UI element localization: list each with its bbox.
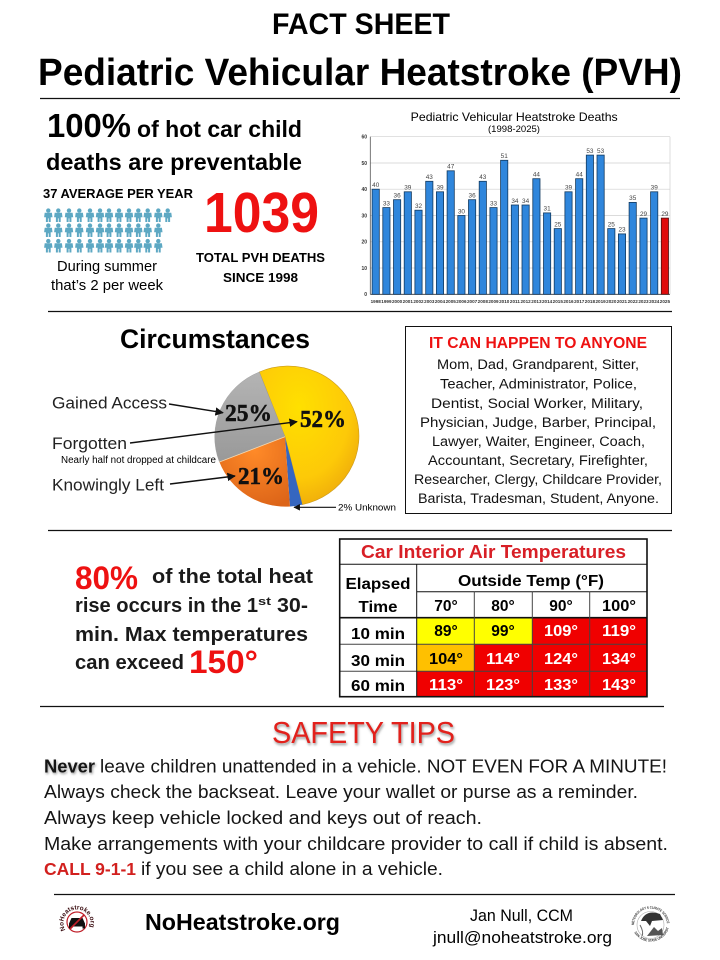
x axis year labels: 2006 bbox=[456, 299, 467, 304]
x axis year labels: 2018 bbox=[585, 299, 595, 304]
table headers: Time bbox=[358, 599, 398, 616]
list of people: Researcher, Clergy, Childcare Provider, bbox=[414, 472, 662, 487]
headline: 100% preventable bbox=[46, 107, 302, 175]
table rows: 30 min bbox=[351, 653, 405, 670]
label: forgotten with arrow: Nearly half not dropped at childcare bbox=[61, 455, 216, 466]
website link text: NoHeatstroke.org bbox=[145, 909, 340, 935]
panel: it can happen to anyone: IT CAN HAPPEN TO ANYONE bbox=[429, 335, 647, 352]
x axis year labels: 2008 bbox=[478, 299, 488, 304]
table rows: 134° bbox=[602, 651, 636, 668]
tip: childcare arrangements: Make arrangements with your childcare provider to call if child is absent. bbox=[44, 833, 668, 854]
bar value labels: 39 bbox=[436, 185, 444, 192]
percent labels: 21% bbox=[238, 464, 284, 490]
y axis labels bbox=[361, 134, 367, 298]
safety tips list bbox=[44, 756, 668, 879]
callout: 80% of heat rise: can exceed bbox=[75, 651, 184, 674]
list of people: Teacher, Administrator, Police, bbox=[440, 376, 637, 392]
list of people: Accountant, Secretary, Firefighter, bbox=[428, 453, 648, 468]
list of people: Barista, Tradesman, Student, Anyone. bbox=[418, 491, 659, 506]
stat: 37 average per year: that’s 2 per week bbox=[51, 277, 163, 294]
label: gained access with arrow bbox=[52, 394, 223, 413]
bar value labels: 34 bbox=[522, 198, 530, 205]
tip: never leave children: Never bbox=[45, 757, 96, 778]
y axis labels: 10 bbox=[361, 266, 367, 272]
callout: 80% of heat rise bbox=[75, 560, 313, 680]
y axis labels: 30 bbox=[361, 213, 367, 219]
icon: meteorology department seal: METEOROLOGY & CLIMATE SCIENCE bbox=[632, 906, 670, 925]
table title: Car Interior Air Temperatures bbox=[361, 542, 626, 562]
headline: 100% preventable: 100% bbox=[47, 107, 131, 144]
bar value labels: 32 bbox=[415, 203, 422, 210]
label: knowingly left with arrow: Knowingly Left bbox=[52, 476, 164, 494]
list of people bbox=[414, 357, 662, 506]
x axis year labels: 2016 bbox=[563, 299, 574, 304]
list of people: Physician, Judge, Barber, Principal, bbox=[420, 415, 656, 430]
x axis year labels: 2020 bbox=[606, 299, 617, 304]
callout: 80% of heat rise: of the total heat bbox=[152, 565, 313, 588]
bar value labels: 35 bbox=[629, 195, 637, 202]
x axis year labels: 2014 bbox=[542, 299, 553, 304]
table headers: 90° bbox=[549, 598, 573, 615]
bar value labels: 53 bbox=[597, 148, 605, 155]
contact details bbox=[432, 907, 612, 947]
bars bbox=[372, 155, 668, 294]
headline: 100% preventable: of hot car child bbox=[137, 116, 302, 142]
x axis year labels: 2012 bbox=[520, 299, 531, 304]
bar value labels: 29 bbox=[661, 211, 669, 218]
tip: never leave children: leave children unattended in a vehicle. NOT EVEN FOR A MINUTE! bbox=[100, 756, 667, 777]
list of people: Mom, Dad, Grandparent, Sitter, bbox=[437, 357, 639, 372]
bar value labels: 44 bbox=[533, 172, 540, 178]
bar value labels: 25 bbox=[608, 221, 615, 228]
label: gained access with arrow: Gained Access bbox=[52, 394, 167, 412]
percent labels: 25% bbox=[225, 401, 272, 427]
table rows: 104° bbox=[429, 651, 463, 668]
stat: 1039 total deaths: TOTAL PVH DEATHS bbox=[196, 250, 325, 265]
x axis year labels: 2013 bbox=[531, 299, 542, 304]
table rows: 10 min bbox=[351, 626, 405, 643]
callout: 80% of heat rise: 150° bbox=[189, 644, 258, 680]
bar value labels: 53 bbox=[586, 148, 594, 155]
list of people: Dentist, Social Worker, Military, bbox=[431, 396, 643, 411]
table headers: Outside Temp (°F) bbox=[458, 573, 604, 590]
bar value labels: 25 bbox=[554, 221, 562, 228]
label: forgotten with arrow bbox=[52, 422, 297, 466]
list of people: Lawyer, Waiter, Engineer, Coach, bbox=[432, 434, 645, 449]
tip: call 9-1-1: if you see a child alone in a vehicle. bbox=[141, 858, 443, 879]
pie slice: knowingly left 21% bbox=[219, 437, 290, 507]
tip: never leave children: Never bbox=[44, 756, 95, 777]
table cell colours bbox=[417, 618, 647, 697]
table rows: 99° bbox=[491, 623, 515, 640]
bar value labels: 39 bbox=[565, 185, 572, 192]
pie slice: forgotten 52% bbox=[259, 366, 359, 505]
x axis year labels: 2024 bbox=[649, 299, 660, 304]
x axis year labels: 2003 bbox=[424, 299, 435, 304]
x axis year labels: 2010 bbox=[499, 299, 510, 304]
table rows: 89° bbox=[434, 623, 458, 640]
bar value labels: 23 bbox=[618, 227, 626, 234]
table rows bbox=[351, 623, 636, 695]
headline: 100% preventable: deaths are preventable bbox=[46, 149, 302, 175]
icon: rows of 37 child figures bbox=[44, 208, 172, 252]
label: knowingly left with arrow bbox=[52, 476, 235, 494]
bar chart: deaths per year bbox=[361, 110, 670, 304]
table headers: 100° bbox=[602, 598, 636, 615]
pie chart: circumstances bbox=[52, 366, 396, 514]
bar value labels: 39 bbox=[651, 185, 658, 192]
y axis labels: 60 bbox=[361, 134, 367, 140]
callout: 80% of heat rise: min. Max temperatures bbox=[75, 623, 308, 646]
label: 2% unknown with arrow: 2% Unknown bbox=[338, 502, 396, 514]
title: Pediatric Vehicular Heatstroke (PVH) bbox=[38, 52, 682, 94]
table: car interior air temperatures bbox=[340, 539, 647, 697]
percent labels bbox=[225, 401, 346, 490]
stat: 37 average per year bbox=[43, 186, 194, 294]
table headers: 70° bbox=[434, 598, 458, 615]
table rows: 143° bbox=[602, 677, 636, 694]
bar value labels: 30 bbox=[458, 208, 465, 215]
bar value labels: 36 bbox=[469, 192, 476, 200]
table rows: 113° bbox=[429, 677, 463, 694]
bar value labels: 40 bbox=[372, 182, 380, 189]
bar value labels: 33 bbox=[383, 200, 390, 207]
x axis year labels: 2007 bbox=[467, 299, 478, 304]
table rows: 119° bbox=[602, 623, 636, 640]
bar value labels: 47 bbox=[447, 164, 455, 171]
bar value labels: 39 bbox=[404, 185, 412, 192]
callout: 80% of heat rise: 30- bbox=[277, 594, 308, 617]
percent labels: 52% bbox=[300, 407, 346, 433]
callout: 80% of heat rise: rise occurs in the 1 bbox=[75, 594, 258, 617]
label: forgotten with arrow: Forgotten bbox=[52, 434, 127, 453]
x axis year labels: 2023 bbox=[638, 299, 649, 304]
stat: 1039 total deaths: SINCE 1998 bbox=[223, 270, 298, 285]
pie slice: gained access 25% bbox=[215, 372, 285, 462]
heading: safety tips: SAFETY TIPS bbox=[272, 715, 455, 750]
stat: 37 average per year: During summer bbox=[57, 258, 157, 275]
bar value labels: 34 bbox=[511, 198, 519, 205]
bar value labels: 31 bbox=[544, 206, 551, 213]
table headers: Elapsed bbox=[346, 576, 410, 593]
contact details: Jan Null, CCM bbox=[470, 907, 573, 925]
bar value labels: 43 bbox=[426, 174, 433, 181]
heading: circumstances: Circumstances bbox=[120, 324, 310, 354]
x axis year labels: 2015 bbox=[553, 299, 563, 304]
y axis labels: 20 bbox=[361, 240, 367, 246]
table rows: 109° bbox=[544, 623, 578, 640]
stat: 1039 total deaths: 1039 bbox=[204, 181, 319, 245]
icon: NoHeatstroke logo: NoHeatstroke.org bbox=[59, 905, 94, 932]
bar value labels: 43 bbox=[479, 174, 487, 181]
callout: 80% of heat rise: 80% bbox=[75, 560, 138, 596]
title: FACT SHEET bbox=[272, 8, 450, 41]
label: 2% unknown with arrow bbox=[294, 502, 396, 514]
table rows: 124° bbox=[544, 651, 578, 668]
x axis year labels: 2004 bbox=[435, 299, 446, 304]
x axis year labels: 2009 bbox=[488, 299, 499, 304]
x axis year labels: 2017 bbox=[574, 299, 585, 304]
x axis year labels: 1998 bbox=[371, 299, 381, 304]
y axis labels: 50 bbox=[361, 161, 367, 167]
x axis year labels: 2000 bbox=[392, 299, 403, 304]
chart title: Pediatric Vehicular Heatstroke Deaths bbox=[411, 110, 618, 124]
bar value labels bbox=[372, 148, 669, 234]
x axis year labels: 2005 bbox=[446, 299, 456, 304]
bar value labels: 51 bbox=[501, 153, 508, 160]
table grid bbox=[340, 539, 647, 697]
table rows: 60 min bbox=[351, 678, 405, 695]
x axis year labels: 2022 bbox=[628, 299, 638, 304]
bar value labels: 44 bbox=[576, 172, 583, 178]
x axis year labels: 2025 bbox=[660, 299, 670, 304]
table rows: 133° bbox=[544, 677, 578, 694]
x axis year labels: 2019 bbox=[595, 299, 606, 304]
bar value labels: 33 bbox=[490, 200, 497, 207]
panel: it can happen to anyone bbox=[406, 326, 672, 514]
tip: call 9-1-1: CALL 9-1-1 bbox=[44, 859, 136, 879]
icon: meteorology department seal: SAN JOSE STATE UNIVERSITY bbox=[634, 927, 669, 942]
bar value labels: 29 bbox=[640, 211, 647, 218]
tip: keep vehicle locked: Always keep vehicle locked and keys out of reach. bbox=[44, 807, 482, 828]
title bbox=[38, 8, 682, 94]
table rows: 114° bbox=[486, 651, 520, 668]
x axis year labels: 1999 bbox=[381, 299, 392, 304]
bar value labels: 36 bbox=[394, 192, 401, 200]
table headers: 80° bbox=[491, 598, 515, 615]
heading: safety tips: SAFETY TIPS bbox=[273, 717, 456, 752]
x axis year labels: 2011 bbox=[510, 299, 520, 304]
table headers bbox=[346, 573, 636, 616]
callout: 80% of heat rise: st bbox=[258, 596, 271, 608]
y axis labels: 40 bbox=[361, 187, 367, 193]
x axis year labels: 2001 bbox=[403, 299, 413, 304]
stat: 1039 total deaths bbox=[196, 181, 325, 285]
contact details: jnull@noheatstroke.org bbox=[432, 929, 612, 947]
x axis year labels: 2021 bbox=[617, 299, 628, 304]
x axis year labels: 2002 bbox=[413, 299, 424, 304]
y axis labels: 0 bbox=[364, 292, 367, 298]
chart title bbox=[411, 110, 618, 134]
stat: 37 average per year: 37 AVERAGE PER YEAR bbox=[43, 186, 194, 201]
chart title: (1998-2025) bbox=[488, 124, 540, 134]
x axis year labels bbox=[371, 299, 670, 304]
pie slice: unknown 2% bbox=[285, 437, 302, 506]
tip: check backseat: Always check the backseat. Leave your wallet or purse as a reminder. bbox=[44, 781, 638, 802]
table rows: 123° bbox=[486, 677, 520, 694]
